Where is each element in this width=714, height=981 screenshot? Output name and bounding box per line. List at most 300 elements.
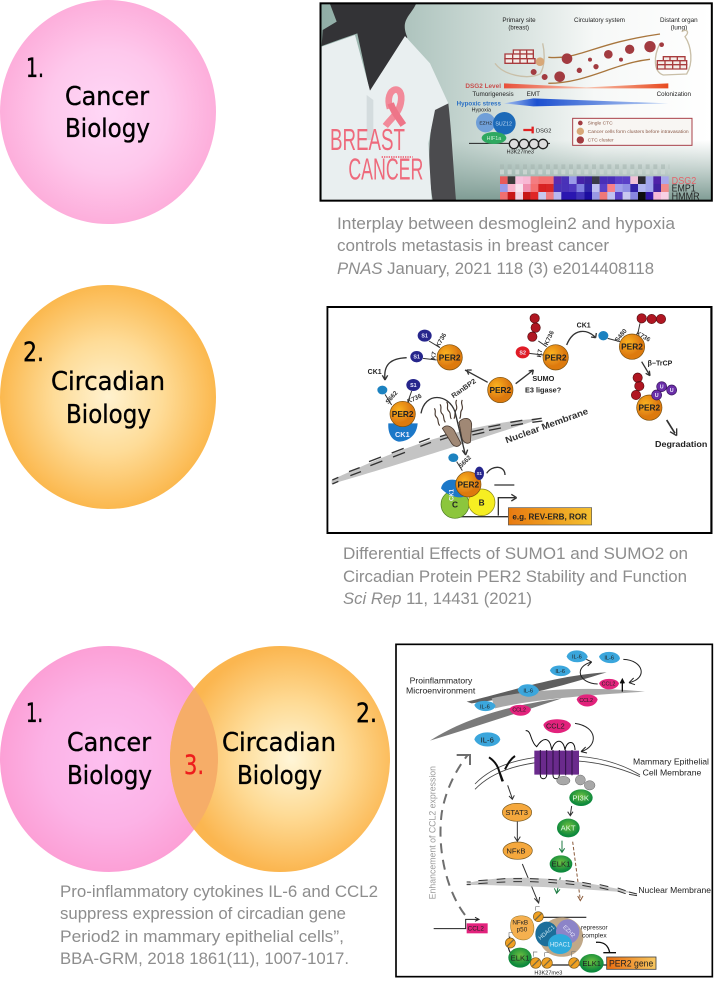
histone marks	[505, 912, 579, 968]
label: beta-TrCP: β−TrCP	[648, 361, 673, 368]
CCL2 ligands	[509, 679, 619, 733]
invasive cluster	[536, 57, 544, 66]
label: CCL2 gene: CCL2	[468, 926, 484, 933]
IL-6 d	[518, 684, 539, 697]
arrow to SUMO2 PER2	[516, 370, 533, 384]
NFkB p50 node	[511, 916, 534, 940]
upper wall	[548, 34, 660, 58]
bare arm	[429, 103, 456, 201]
IL-6 a	[567, 650, 588, 662]
label: proinflammatory: Proinflammatory	[410, 675, 473, 685]
IL-6 text b: IL-6	[604, 655, 614, 661]
S662 nuclear: S662	[457, 454, 473, 470]
light fibre	[492, 689, 645, 708]
PI3K to AKT	[568, 806, 573, 816]
legend box	[573, 118, 692, 145]
caption line 2: Circadian Protein PER2 Stability and Function	[343, 567, 687, 586]
PER2 middle	[543, 345, 568, 370]
caption line 3: PNAS January, 2021 118 (3) e2014408118	[337, 259, 654, 278]
promoter baseline	[450, 515, 510, 519]
S1 text top: S1	[421, 334, 428, 340]
K736 top left: K736	[435, 332, 449, 349]
IL-6 text d: IL-6	[523, 688, 533, 694]
label: mammary epithelial: Mammary Epithelial	[633, 757, 709, 767]
K736 left: K736	[406, 393, 423, 405]
S662 left: S662	[385, 389, 400, 406]
K736 middle: K736	[543, 329, 556, 347]
caption: SUMO paper	[343, 544, 688, 608]
dendrogram lower row	[500, 165, 669, 179]
label: B: B	[479, 498, 485, 508]
label: biology: Biology	[65, 114, 150, 144]
label: nuclear S1: S1	[477, 471, 483, 476]
receptor helices	[534, 751, 579, 775]
right loop	[623, 659, 641, 683]
IL-6 receptor	[489, 756, 515, 781]
number 3: 3.	[184, 750, 204, 781]
EZH2 protein	[476, 113, 495, 132]
circulating tumour cells	[531, 41, 664, 82]
dotted rule	[382, 154, 413, 159]
CCL2 to receptor curve	[575, 723, 593, 752]
ubiquitin label 2: U	[660, 385, 664, 391]
lower background shade	[453, 140, 712, 201]
lung tumour brick cells	[657, 57, 687, 69]
number 1: 1.	[26, 53, 44, 84]
IL-6 text f: IL-6	[481, 735, 494, 744]
number 2: 2.	[356, 698, 377, 729]
heat map row DSG2	[500, 176, 669, 184]
nuclear complex	[441, 467, 495, 518]
CCL2 text c: CCL2	[512, 708, 526, 714]
nucleosomes	[509, 139, 548, 149]
label: NFkB: NFκB	[506, 846, 525, 855]
repressor complex	[535, 917, 583, 957]
SUZ12 protein	[493, 112, 516, 135]
cell membrane	[475, 756, 640, 789]
heading: lung: (lung)	[671, 25, 687, 32]
chain degraded	[631, 373, 644, 400]
label: biology left: Biology	[67, 761, 152, 791]
label PER2 1: PER2	[439, 352, 461, 362]
nuclear P	[475, 467, 484, 480]
label: RanBP2: RanBP2	[450, 378, 478, 400]
P right	[598, 331, 608, 340]
brick row two	[505, 54, 533, 59]
STAT3 node	[502, 803, 532, 821]
caption line 2: suppress expression of circadian gene	[60, 904, 346, 923]
IL-6 c	[550, 666, 571, 676]
pathway arrows	[382, 331, 677, 517]
histone flags	[509, 907, 576, 957]
IL-6 f	[474, 732, 500, 746]
chromatin line	[469, 142, 550, 145]
label: colonization: Colonization	[657, 91, 691, 98]
single cells	[531, 42, 664, 80]
heat map label: DSG2: DSG2	[672, 176, 696, 187]
heading: circulatory system: Circulatory system	[574, 17, 625, 24]
IL-6 e	[474, 701, 496, 711]
label: SUMO E3 ligase: SUMO	[532, 374, 555, 383]
S2 tag	[516, 346, 530, 358]
upregulation arrow	[620, 679, 624, 692]
label: AKT: AKT	[561, 824, 576, 833]
label: p50: p50	[517, 927, 528, 934]
cell group	[554, 41, 656, 82]
label PER2 6: PER2	[638, 403, 661, 413]
pore filaments	[434, 400, 463, 426]
inhibition line	[596, 942, 616, 953]
S1 text left: S1	[413, 355, 420, 361]
chain right	[637, 314, 666, 324]
lung brick row one	[663, 57, 685, 61]
ribbon tail	[391, 103, 403, 125]
label: target genes: e.g. REV-ERB, ROR	[512, 512, 587, 521]
legend text: single CTC: Single CTC	[588, 121, 613, 127]
label: complex: complex	[582, 933, 608, 940]
caption: IL-6 paper	[60, 882, 378, 968]
label: nuclear PER2: PER2	[457, 479, 480, 489]
IL-6 to STAT3	[508, 785, 514, 799]
tag linkers	[385, 323, 640, 480]
histone mark stripes	[507, 913, 577, 966]
arrow to SUMO1 PER2	[465, 370, 488, 382]
panel border	[327, 307, 711, 533]
receptor tail	[526, 731, 575, 750]
panel background	[328, 307, 712, 533]
HDAC1 dark	[535, 922, 558, 946]
heading: breast: (breast)	[508, 25, 529, 32]
panel background	[396, 644, 712, 974]
ubiquitin label 1: U	[670, 388, 674, 394]
K7 middle: K7	[536, 348, 544, 358]
label: enhancement of CCL2 expression: Enhancement of CCL2 expression	[428, 766, 438, 899]
PER2 gene box	[607, 957, 656, 969]
CLOCK protein	[441, 490, 469, 518]
heading: distant organ: Distant organ	[660, 17, 698, 24]
stromal fibres	[430, 672, 645, 741]
caption line 3: Period2 in mammary epithelial cells”,	[60, 927, 344, 946]
GPCR receptor	[526, 731, 579, 779]
pink ribbon	[385, 90, 403, 126]
title: cancer: CANCER	[348, 152, 423, 186]
complex tan backing	[540, 917, 583, 957]
label: ELK1: ELK1	[552, 860, 570, 869]
S2 label: S2	[519, 350, 526, 356]
IL-6 labels	[480, 655, 614, 744]
HDAC1 light	[548, 934, 572, 954]
nuclear CK1	[441, 480, 467, 497]
PER2 left	[390, 401, 415, 427]
SUMO2 chains	[528, 314, 666, 400]
inhibition bar	[494, 483, 514, 487]
G protein b	[575, 775, 585, 785]
IL-6 text c: IL-6	[555, 669, 565, 675]
membrane outer	[475, 756, 640, 784]
caption line 1: Pro-inflammatory cytokines IL-6 and CCL2	[60, 882, 378, 901]
S1 top	[418, 330, 432, 342]
title: breast: BREAST	[330, 123, 405, 157]
IL-6 ligands	[474, 650, 620, 746]
CK1 curve right	[567, 331, 596, 345]
HIF1a protein	[482, 132, 506, 144]
label: H3K27me3: H3K27me3	[507, 149, 534, 155]
pore left lobe	[442, 426, 461, 446]
panel border	[396, 644, 712, 977]
label: HIF1a: HIF1a	[487, 136, 501, 142]
circle: cancer biology	[0, 0, 216, 224]
nuclear import curve	[421, 397, 465, 453]
head and hair silhouette	[322, 4, 416, 93]
label: DSG2 target: DSG2	[536, 128, 551, 134]
lung brick row two	[657, 61, 687, 65]
nuclear membrane	[467, 878, 637, 893]
caption: desmoglein2 paper	[337, 214, 676, 278]
label: EZH2: EZH2	[561, 925, 576, 939]
caption line 3: Sci Rep 11, 14431 (2021)	[343, 589, 532, 608]
number 1: 1.	[26, 698, 43, 729]
heat map	[500, 176, 669, 200]
label: PER2 gene: PER2 gene	[609, 958, 653, 968]
orange circle	[0, 285, 216, 509]
panel: IL-6 and CCL2 signalling	[396, 644, 712, 977]
IL-6 text e: IL-6	[480, 704, 490, 710]
arrow tips	[382, 333, 677, 501]
promoter arrow	[498, 498, 515, 516]
G proteins	[557, 775, 595, 790]
label: cancer: Cancer	[65, 82, 149, 112]
label: EMT: EMT	[527, 91, 540, 98]
EZH2	[556, 919, 579, 944]
label: degradation: Degradation	[655, 439, 707, 449]
ELK1 to nucleus green arrow	[554, 877, 560, 893]
arrow to degradation	[667, 420, 675, 433]
circle: circadian biology	[0, 285, 216, 509]
label: CK1 right: CK1	[577, 322, 591, 329]
panel background	[320, 3, 712, 201]
blood vessel walls	[548, 34, 660, 83]
label: C: C	[452, 500, 458, 510]
caption line 4: BBA-GRM, 2018 1861(11), 1007-1017.	[60, 949, 349, 968]
PER2 degraded	[637, 395, 662, 420]
label: cancer: Cancer	[67, 728, 151, 758]
heading: primary site: Primary site	[502, 17, 536, 24]
legend icon: cluster forming	[577, 128, 584, 135]
heat map label: EMP1: EMP1	[672, 184, 696, 195]
label: EZH2: EZH2	[479, 121, 492, 127]
S480: S480	[614, 327, 629, 344]
ELK1 node right	[580, 954, 604, 973]
label: H3K27me3: H3K27me3	[534, 970, 562, 976]
lung tissue outline	[655, 30, 691, 75]
legend icon: single CTC	[578, 121, 583, 125]
venn diagram	[0, 646, 390, 872]
histone mark 5	[569, 958, 579, 968]
arrow down to degraded PER2	[642, 362, 650, 376]
lower fibre	[430, 698, 562, 741]
caption line 1: Differential Effects of SUMO1 and SUMO2 on	[343, 544, 688, 563]
P nuclear	[448, 453, 458, 462]
histone mark 4	[542, 958, 552, 968]
primary tissue outline	[495, 43, 544, 77]
label: NFkB nucleus: NFκB	[512, 919, 528, 926]
CCL2 labels	[512, 682, 615, 730]
CK1 curve left	[385, 358, 407, 380]
pink circle	[0, 0, 216, 224]
chain middle	[528, 314, 540, 341]
helix separators	[540, 750, 572, 775]
histone mark 2	[505, 938, 515, 948]
label: cell membrane: Cell Membrane	[643, 767, 702, 777]
BMAL protein	[468, 489, 495, 516]
label: nuclear membrane: Nuclear Membrane	[638, 885, 711, 895]
label: nuclear CK1: CK1	[449, 488, 455, 501]
label PER2 4: PER2	[621, 342, 643, 352]
number 2: 2.	[23, 337, 44, 368]
AKT node	[557, 819, 580, 837]
venn overlap	[170, 688, 218, 830]
CCL2 text a: CCL2	[602, 682, 615, 688]
legend border	[573, 118, 692, 145]
venn circle: cancer	[0, 646, 218, 872]
brick row one	[513, 50, 533, 54]
SUMO1 text	[410, 334, 428, 389]
CCL2 text d: CCL2	[546, 721, 565, 730]
label: SUZ12: SUZ12	[495, 121, 512, 127]
label: biology right: Biology	[237, 761, 322, 791]
lower wall	[548, 59, 650, 83]
label: circadian: Circadian	[222, 728, 336, 758]
label: STAT3: STAT3	[505, 808, 528, 817]
label: tumorigenesis: Tumorigenesis	[472, 91, 514, 98]
heat map label: HMMR: HMMR	[672, 192, 700, 203]
label: ELK1 right: ELK1	[582, 959, 601, 968]
brown arrowhead	[578, 896, 583, 901]
label: repressor: repressor	[581, 924, 608, 931]
label: HDAC1 light: HDAC1	[550, 942, 571, 948]
lung brick row three	[657, 65, 687, 69]
signalling arrows	[508, 785, 573, 903]
label: circadian: Circadian	[51, 367, 165, 397]
AKT to nucleus brown arrow	[573, 842, 580, 900]
label: DSG2 level: DSG2 Level	[465, 83, 501, 90]
AKT to ELK1 green arrow	[559, 841, 565, 852]
label: E3 ligase: E3 ligase?	[525, 385, 562, 394]
label PER2 3: PER2	[545, 352, 567, 362]
K7 left: K7	[430, 351, 438, 360]
nuclear pore	[434, 400, 472, 446]
shirt	[322, 35, 448, 201]
pore right lobe	[459, 418, 472, 443]
site labels	[385, 327, 652, 470]
phosphate tags	[377, 331, 608, 462]
S1 left	[410, 351, 423, 362]
brick row three	[505, 59, 535, 63]
IL-6 text a: IL-6	[572, 655, 582, 661]
SUMO1 tags	[406, 330, 432, 391]
label: CK1 left: CK1	[368, 369, 382, 376]
IL-6 b	[599, 652, 620, 663]
inhibition symbol	[523, 127, 533, 133]
S1 lower	[406, 379, 420, 391]
ribbon loop	[385, 90, 401, 126]
dendrogram loops	[500, 167, 669, 172]
nuclear PER2	[456, 472, 481, 497]
chromatin strand	[508, 917, 608, 965]
nuclear pore dashes	[467, 879, 637, 896]
label: hypoxic stress: Hypoxic stress	[457, 100, 501, 107]
hypoxic stress wedge	[504, 98, 668, 106]
DSG2 level bar	[504, 83, 668, 88]
label PER2 2: PER2	[489, 385, 512, 395]
CCL2 a	[599, 679, 619, 689]
PER2 labels	[392, 342, 661, 419]
S1 text lower: S1	[410, 383, 417, 389]
histone mark 3	[530, 958, 541, 968]
CCL2 gene box	[467, 923, 488, 933]
ELK1 node left	[508, 948, 532, 968]
CCL2 d	[543, 719, 571, 733]
ubiquitin circles	[652, 382, 677, 400]
venn circle: circadian	[170, 646, 390, 872]
label: PI3K: PI3K	[572, 793, 590, 802]
label: nuclear membrane: Nuclear Membrane	[504, 406, 589, 445]
dendrogram upper row	[500, 160, 669, 174]
repression arc	[487, 467, 505, 475]
NFkB to promoter	[522, 864, 540, 903]
G protein c	[584, 781, 595, 790]
PER2 nodes	[390, 334, 662, 427]
label: CK1 protein: CK1	[395, 430, 410, 439]
autocrine arrows	[575, 659, 641, 753]
nucleosome row	[509, 139, 548, 149]
target gene box	[508, 508, 592, 525]
membrane inner	[475, 761, 640, 789]
heat map row HMMR	[500, 192, 669, 200]
label: hypoxia: Hypoxia	[472, 108, 492, 114]
legend text: CTC cluster: CTC cluster	[588, 138, 614, 144]
woman figure	[322, 4, 456, 201]
CCL2 promoter line	[434, 917, 479, 929]
legend text: cluster forming: Cancer cells form clusters before intravasation	[588, 129, 689, 135]
histone mark 1	[533, 912, 543, 922]
left loop	[580, 662, 598, 684]
panel border	[320, 3, 712, 201]
shirt shading	[367, 95, 373, 140]
label: microenvironment: Microenvironment	[406, 686, 476, 696]
panel: PER2 SUMOylation pathway	[327, 307, 712, 533]
nuclear membrane band	[332, 418, 542, 484]
tissue outlines	[495, 30, 691, 77]
P left	[377, 386, 387, 394]
ubiquitin label 3: U	[655, 393, 659, 399]
dark fibre	[467, 672, 607, 703]
CK1 protein	[388, 423, 418, 442]
PI3K node	[569, 789, 593, 806]
panel: breast cancer metastasis figure	[320, 3, 712, 203]
caption line 1: Interplay between desmoglein2 and hypoxia	[337, 214, 676, 233]
CCL2 b	[577, 694, 598, 706]
dashed arrowhead	[457, 755, 470, 765]
CCL2 c	[509, 705, 531, 716]
PER2 center	[488, 377, 513, 403]
label: biology: Biology	[66, 400, 151, 430]
dashed curve	[440, 755, 468, 915]
label PER2 5: PER2	[392, 409, 414, 419]
legend icon: CTC cluster	[577, 136, 584, 144]
ELK1 node	[550, 855, 572, 873]
label: HDAC1 dark: HDAC1	[538, 925, 556, 942]
